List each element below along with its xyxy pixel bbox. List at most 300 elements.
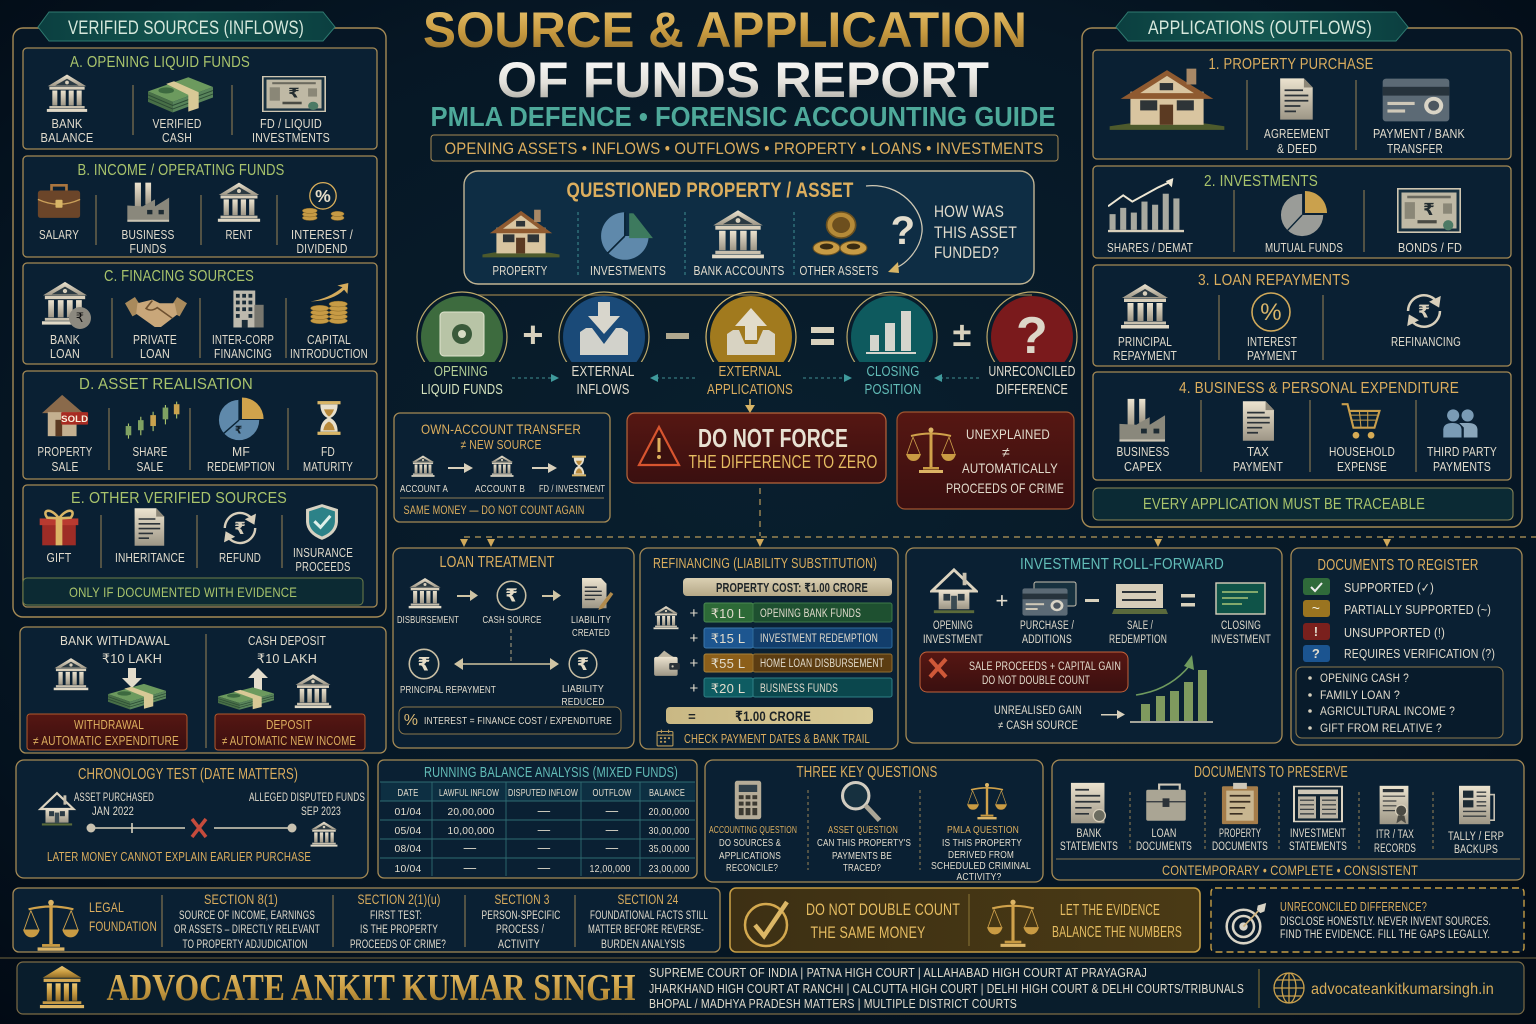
item: pmla question: PMLA QUESTION <box>947 824 1019 836</box>
item: liability reduced: REDUCED <box>562 696 605 708</box>
tagline: CONTEMPORARY • COMPLETE • CONSISTENT <box>1162 862 1418 878</box>
status: partially supported: ~ <box>1312 600 1320 616</box>
item: cash source: CASH SOURCE <box>482 614 542 626</box>
website: advocateankitkumarsingh.in <box>1311 981 1494 998</box>
item: inheritance <box>115 508 185 565</box>
item: investment statements: STATEMENTS <box>1289 841 1347 853</box>
circle: external inflows: EXTERNAL <box>572 363 634 380</box>
status: unsupported: UNSUPPORTED (!) <box>1344 626 1445 640</box>
item: loan documents: DOCUMENTS <box>1136 841 1192 853</box>
item: household expense: EXPENSE <box>1337 460 1387 474</box>
item: pmla question: DERIVED FROM <box>948 849 1014 861</box>
item: bonds fd <box>1398 189 1462 255</box>
panel: D asset realisation <box>23 371 377 479</box>
header: verified sources <box>38 12 335 41</box>
question mark: ? <box>891 209 915 253</box>
table: OUTFLOW <box>592 787 632 799</box>
panel: three key questions: THREE KEY QUESTIONS <box>796 764 938 781</box>
left event: ASSET PURCHASED <box>74 792 154 804</box>
callout: do not double count <box>920 652 1128 692</box>
item: mf redemption: MF <box>232 445 250 459</box>
cash deposit: ≠ AUTOMATIC NEW INCOME <box>222 734 356 748</box>
circle: external inflows <box>559 292 649 398</box>
note: only if documented: ONLY IF DOCUMENTED WITH EVIDENCE <box>69 584 297 600</box>
item: shares demat: SHARES / DEMAT <box>1107 241 1193 255</box>
item: household expense: HOUSEHOLD <box>1329 445 1395 459</box>
title line 2: OF FUNDS REPORT <box>497 52 989 108</box>
item: sale redemption: REDEMPTION <box>1109 634 1167 646</box>
panel: own-account transfer: ACCOUNT B <box>475 483 525 495</box>
title block <box>423 2 1058 161</box>
item: principal repayment <box>1113 284 1177 363</box>
header: verified sources: VERIFIED SOURCES (INFLOWS) <box>68 18 304 39</box>
item: share sale: SALE <box>136 460 164 474</box>
checklist: FAMILY LOAN ? <box>1320 690 1400 702</box>
panel: A opening liquid funds: A. OPENING LIQUID FUNDS <box>70 54 250 71</box>
panel: verified sources (inflows) <box>13 12 386 617</box>
panel: 1 property purchase: 1. PROPERTY PURCHASE <box>1208 56 1374 73</box>
item: third party payments <box>1427 409 1497 474</box>
item: tally erp backups: TALLY / ERP <box>1448 831 1504 843</box>
item: private loan: LOAN <box>140 347 170 361</box>
operator equals <box>811 327 834 345</box>
item: accounting question: DO SOURCES & <box>719 837 781 849</box>
item: itr tax records: RECORDS <box>1374 843 1416 855</box>
item: accounting question: APPLICATIONS <box>719 850 781 862</box>
cash deposit: ₹10 LAKH <box>257 651 317 666</box>
panel: own-account transfer: SAME MONEY — DO NOT COUNT AGAIN <box>404 503 584 517</box>
panel: investment roll-forward: INVESTMENT ROLL-FORWARD <box>1020 556 1224 573</box>
panel: 4 business and personal expenditure <box>1093 372 1511 480</box>
item: payment bank transfer: PAYMENT / BANK <box>1373 127 1465 141</box>
courts list <box>649 966 1244 1011</box>
table <box>380 782 695 876</box>
section 24: BURDEN ANALYSIS <box>601 939 685 951</box>
table: — <box>538 841 551 855</box>
item: principal repayment <box>400 649 496 696</box>
item: opening investment <box>923 570 983 646</box>
item: verified cash <box>148 77 213 145</box>
table: DATE <box>398 787 418 799</box>
panel: documents to preserve <box>1052 760 1524 880</box>
note: check payment dates: CHECK PAYMENT DATES & BANK TRAIL <box>684 732 870 746</box>
status: partially supported: PARTIALLY SUPPORTED (~) <box>1344 603 1491 617</box>
item: bank loan: LOAN <box>50 347 80 361</box>
callout: unreconciled difference: UNRECONCILED DIFFERENCE? <box>1280 900 1427 914</box>
icon: scales <box>23 900 79 951</box>
checklist: OPENING CASH ? <box>1320 673 1409 685</box>
item: salary: SALARY <box>39 228 79 242</box>
panel: questioned property / asset <box>464 171 1034 284</box>
item: mutual funds <box>1265 191 1343 255</box>
bank withdrawal: ≠ AUTOMATIC EXPENDITURE <box>33 734 179 748</box>
panel: own-account transfer: FD / INVESTMENT <box>539 483 605 495</box>
arrows <box>448 463 557 473</box>
section 2(1)(u) <box>350 892 446 951</box>
bank withdrawal: ₹10 LAKH <box>102 651 162 666</box>
item: tax payment <box>1233 401 1283 474</box>
connector <box>510 629 512 664</box>
item: business funds <box>122 183 174 256</box>
section 24 <box>588 892 708 951</box>
panel: 3 loan repayments <box>1093 265 1511 366</box>
panel: 3 loan repayments: 3. LOAN REPAYMENTS <box>1198 272 1350 289</box>
item: interest dividend: DIVIDEND <box>296 242 348 256</box>
panel: E other verified sources: E. OTHER VERIFIED SOURCES <box>71 490 287 507</box>
panel: 2 investments <box>1093 166 1511 258</box>
item: investment statements: INVESTMENT <box>1290 828 1346 840</box>
chart: rising bars <box>1130 655 1213 722</box>
item: property documents: PROPERTY <box>1219 828 1261 840</box>
section 2(1)(u): SECTION 2(1)(u) <box>358 892 440 907</box>
callout: unexplained not proceeds of crime <box>897 412 1074 509</box>
label: LEGAL <box>89 899 124 915</box>
panel: own-account transfer: OWN-ACCOUNT TRANSFER <box>421 421 581 437</box>
panel: running balance analysis: RUNNING BALANCE ANALYSIS (MIXED FUNDS) <box>424 764 678 781</box>
row: investment redemption: + <box>690 630 699 647</box>
item: inter-corp financing: FINANCING <box>214 347 272 361</box>
item: capital introduction <box>290 283 368 361</box>
item: closing investment <box>1211 583 1271 646</box>
item: bank statements <box>1060 783 1118 853</box>
item: property sale: SALE <box>52 460 78 474</box>
panel: B income operating funds: B. INCOME / OPERATING FUNDS <box>78 162 284 179</box>
row: home loan disbursement: + <box>690 655 699 672</box>
panel: 2 investments: 2. INVESTMENTS <box>1204 173 1318 190</box>
callout: do not force: DO NOT FORCE <box>698 423 848 453</box>
cash deposit: CASH DEPOSIT <box>248 633 326 648</box>
item: interest payment: PAYMENT <box>1247 349 1297 363</box>
panel: E other verified sources <box>23 485 377 607</box>
item: accounting question: ACCOUNTING QUESTION <box>709 824 797 836</box>
item: fd maturity <box>303 401 353 474</box>
item: asset question: ASSET QUESTION <box>828 824 898 836</box>
icon: target <box>1227 903 1266 943</box>
timeline <box>86 819 296 837</box>
item: liability created <box>571 578 613 639</box>
item: share sale: SHARE <box>132 445 168 459</box>
note: traceable <box>1093 488 1513 520</box>
table: — <box>538 823 551 837</box>
bank withdrawal: BANK WITHDAWAL <box>60 633 170 648</box>
item: verified cash: VERIFIED <box>152 117 202 131</box>
item: inter-corp financing <box>212 291 274 361</box>
row: opening bank funds: OPENING BANK FUNDS <box>760 608 861 620</box>
item: fd liquid investments <box>252 77 330 145</box>
left event <box>74 792 154 818</box>
item: itr tax records <box>1374 786 1416 855</box>
item: tax payment: PAYMENT <box>1233 460 1283 474</box>
item: capital introduction: CAPITAL <box>307 333 351 347</box>
panel: C financing sources: C. FINACING SOURCES <box>104 268 254 285</box>
equation row <box>417 292 1077 398</box>
cash deposit <box>215 633 365 750</box>
connector: dashed distribution line <box>460 488 1536 547</box>
footer <box>17 962 1524 1014</box>
table: 35,00,000 <box>648 843 690 855</box>
note: interest: % <box>404 712 418 729</box>
item: bank statements: BANK <box>1076 828 1102 840</box>
item: fd liquid investments: INVESTMENTS <box>252 131 330 145</box>
circle: closing position: POSITION <box>864 381 922 398</box>
panel: A opening liquid funds <box>23 48 377 149</box>
item: principal repayment: PRINCIPAL REPAYMENT <box>400 684 496 696</box>
callout: do not force <box>627 413 886 483</box>
item: pmla question: ACTIVITY? <box>956 871 1002 883</box>
table: 23,00,000 <box>648 863 690 875</box>
item: accounting question: RECONCILE? <box>726 862 778 874</box>
item: bank loan: BANK <box>50 333 80 347</box>
item: loan documents <box>1136 785 1192 853</box>
heading: QUESTIONED PROPERTY / ASSET <box>566 179 854 202</box>
row: business funds <box>690 678 892 697</box>
note: unrealised gain: UNREALISED GAIN <box>994 705 1082 717</box>
item: agreement and deed: & DEED <box>1277 142 1317 156</box>
item: household expense <box>1329 404 1395 474</box>
circle: opening liquid funds: LIQUID FUNDS <box>421 381 503 398</box>
pill: property cost <box>683 578 892 596</box>
circle: external applications <box>706 292 796 398</box>
panel: 1 property purchase <box>1093 50 1511 159</box>
item: bank balance: BANK <box>52 117 83 131</box>
section 3 <box>482 892 560 951</box>
icon: bank <box>654 606 678 629</box>
item: interest dividend: INTEREST / <box>291 228 353 242</box>
panel: documents to register <box>1291 548 1522 745</box>
panel: own-account transfer: ≠ NEW SOURCE <box>460 437 542 452</box>
conclusion: LATER MONEY CANNOT EXPLAIN EARLIER PURCHASE <box>47 849 311 864</box>
status: supported <box>1303 578 1434 595</box>
checklist: AGRICULTURAL INCOME ? <box>1320 706 1455 718</box>
table: BALANCE <box>649 787 685 799</box>
header: applications <box>1116 12 1408 41</box>
callout: do not force: THE DIFFERENCE TO ZERO <box>688 452 878 472</box>
item: pmla question: IS THIS PROPERTY <box>942 837 1022 849</box>
item: share sale <box>126 402 179 474</box>
panel: three key questions <box>705 760 1043 883</box>
how was this asset funded: FUNDED? <box>934 243 999 262</box>
item: bank statements: STATEMENTS <box>1060 841 1118 853</box>
courts list: SUPREME COURT OF INDIA | PATNA HIGH COURT | ALLAHABAD HIGH COURT AT PRAYAGRAJ <box>649 966 1147 980</box>
panel: documents to register: DOCUMENTS TO REGISTER <box>1318 557 1478 574</box>
arrows: dotted flow <box>512 374 981 382</box>
table: — <box>464 841 477 855</box>
item: sale redemption <box>1109 584 1168 646</box>
item: refund: REFUND <box>219 551 261 565</box>
item: asset question <box>817 783 911 874</box>
arrow: applications to warning <box>745 399 755 413</box>
item: property documents: DOCUMENTS <box>1212 841 1268 853</box>
circle: opening liquid funds <box>417 292 507 398</box>
item: accounting question <box>709 781 797 874</box>
icon: check circle <box>745 902 787 946</box>
item: fd maturity: FD <box>321 445 335 459</box>
item: mf redemption: REDEMPTION <box>207 460 275 474</box>
status: supported: SUPPORTED (✓) <box>1344 581 1434 595</box>
panel: chronology test <box>16 760 368 878</box>
item: refinancing <box>1391 295 1461 349</box>
right event <box>249 792 365 818</box>
panel: legal foundation <box>13 888 720 952</box>
courts list: BHOPAL / MADHYA PRADESH MATTERS | MULTIPLE DISTRICT COURTS <box>649 997 1017 1011</box>
item: disbursement: DISBURSEMENT <box>397 614 459 626</box>
item: business funds: FUNDS <box>130 242 166 256</box>
row: home loan disbursement <box>690 654 892 672</box>
icon: scales <box>987 900 1039 947</box>
item: liability created: CREATED <box>572 627 610 639</box>
circle: external applications: APPLICATIONS <box>707 381 793 398</box>
table: 01/04 <box>394 806 422 818</box>
item: bank balance: BALANCE <box>40 131 94 145</box>
item: tax payment: TAX <box>1247 445 1269 459</box>
pill: total: = <box>688 709 696 724</box>
item: property sale <box>38 395 93 474</box>
callout: do not double count the same money: BALANCE THE NUMBERS <box>1052 924 1182 941</box>
table: 20,00,000 <box>448 806 494 818</box>
panel: loan treatment: LOAN TREATMENT <box>440 554 555 571</box>
panel: own-account transfer: ACCOUNT A <box>400 483 448 495</box>
icon: house <box>1110 69 1224 130</box>
row: home loan disbursement: ₹55 L <box>711 656 745 671</box>
section 24: SECTION 24 <box>618 892 679 907</box>
table: DISPUTED INFLOW <box>508 787 578 799</box>
panel: chronology test: CHRONOLOGY TEST (DATE MATTERS) <box>78 766 298 783</box>
section 3: PROCESS / <box>496 924 544 936</box>
panel: refinancing <box>640 548 898 749</box>
item: purchase additions <box>1020 582 1076 646</box>
item: investments <box>590 212 666 278</box>
callout: do not double count the same money <box>730 888 1200 952</box>
table: — <box>606 841 619 855</box>
section 8(1): OR ASSETS – DIRECTLY RELEVANT <box>174 924 320 936</box>
cash deposit: DEPOSIT <box>266 718 312 732</box>
item: inter-corp financing: INTER-CORP <box>212 333 274 347</box>
item: bank balance <box>40 75 94 145</box>
section 8(1): SECTION 8(1) <box>204 892 278 907</box>
item: private loan <box>125 297 187 361</box>
icon: house <box>40 793 74 826</box>
checklist <box>1296 667 1503 738</box>
item: private loan: PRIVATE <box>133 333 177 347</box>
panel: own-account transfer <box>394 413 610 522</box>
item: interest payment: % <box>1260 299 1282 326</box>
header: applications: APPLICATIONS (OUTFLOWS) <box>1148 18 1372 39</box>
item: agreement and deed <box>1264 78 1330 156</box>
item: insurance proceeds: PROCEEDS <box>296 560 350 574</box>
callout: do not double count the same money: THE SAME MONEY <box>810 923 926 942</box>
item: opening investment: INVESTMENT <box>923 634 983 646</box>
item: rent: RENT <box>226 228 253 242</box>
item: other assets: OTHER ASSETS <box>800 264 878 278</box>
item: mf redemption <box>207 397 275 474</box>
panel: investment roll-forward: + <box>995 588 1009 613</box>
table: 20,00,000 <box>648 806 690 818</box>
table: 05/04 <box>394 825 422 837</box>
icon: warning triangle <box>639 427 679 465</box>
pill: total <box>666 707 873 724</box>
advocate name: ADVOCATE ANKIT KUMAR SINGH <box>106 967 636 1009</box>
item: closing investment: CLOSING <box>1221 620 1261 632</box>
note: unrealised gain: ≠ CASH SOURCE <box>998 720 1078 732</box>
table: 10/04 <box>394 863 422 875</box>
bank withdrawal <box>27 633 187 750</box>
item: shares demat <box>1107 178 1193 255</box>
subtitle: PMLA DEFENCE • FORENSIC ACCOUNTING GUIDE <box>430 101 1056 132</box>
note: traceable: EVERY APPLICATION MUST BE TRACEABLE <box>1143 496 1425 513</box>
item: rent <box>218 183 260 242</box>
arrow <box>457 590 478 601</box>
item: third party payments: THIRD PARTY <box>1427 445 1497 459</box>
item: capital introduction: INTRODUCTION <box>290 347 368 361</box>
status: partially supported <box>1303 600 1491 617</box>
callout: do not double count the same money: LET THE EVIDENCE <box>1060 902 1160 919</box>
panel: 4 business and personal expenditure: 4. BUSINESS & PERSONAL EXPENDITURE <box>1179 380 1459 397</box>
item: purchase additions: PURCHASE / <box>1020 620 1074 632</box>
section 8(1): SOURCE OF INCOME, EARNINGS <box>179 910 315 922</box>
item: mutual funds: MUTUAL FUNDS <box>1265 241 1343 255</box>
note: unrealised gain <box>994 705 1125 732</box>
left event: JAN 2022 <box>92 806 134 818</box>
section 24: MATTER BEFORE REVERSE- <box>588 924 704 936</box>
table: 10,00,000 <box>448 825 494 837</box>
item: asset question: PAYMENTS BE <box>832 850 892 862</box>
panel: applications (outflows) <box>1082 12 1522 527</box>
item: investment statements <box>1289 787 1347 853</box>
how was this asset funded: THIS ASSET <box>934 223 1017 242</box>
pill: total: ₹1.00 CRORE <box>735 708 811 724</box>
item: third party payments: PAYMENTS <box>1433 460 1491 474</box>
item: bank loan: ₹ <box>76 310 84 325</box>
right event: SEP 2023 <box>301 806 341 818</box>
item: cash source <box>482 581 542 626</box>
note: only if documented <box>23 578 363 605</box>
icon: globe <box>1274 973 1304 1003</box>
table: — <box>464 861 477 875</box>
row: business funds: ₹20 L <box>711 681 745 696</box>
row: business funds: + <box>690 680 699 697</box>
icon: gold bank <box>40 966 84 1008</box>
table: 12,00,000 <box>590 863 630 875</box>
item: business capex: CAPEX <box>1124 460 1162 474</box>
circle: external applications: EXTERNAL <box>718 363 782 380</box>
section 3: SECTION 3 <box>494 892 550 907</box>
item: pmla question <box>931 783 1031 883</box>
item: pmla question: SCHEDULED CRIMINAL <box>931 860 1031 872</box>
item: tally erp backups: BACKUPS <box>1454 844 1498 856</box>
arrow: question arc <box>866 186 922 273</box>
keywords strip <box>431 135 1058 161</box>
status: requires verification <box>1303 645 1495 662</box>
row: investment redemption: INVESTMENT REDEMPTION <box>760 633 878 645</box>
status: unsupported <box>1303 623 1445 640</box>
item: closing investment: INVESTMENT <box>1211 634 1271 646</box>
item: investments: INVESTMENTS <box>590 264 666 278</box>
section 24: FOUNDATIONAL FACTS STILL <box>590 910 708 922</box>
item: bonds fd: BONDS / FD <box>1398 241 1462 255</box>
status: requires verification: ? <box>1312 646 1320 661</box>
item: payment bank transfer: TRANSFER <box>1387 142 1443 156</box>
item: payment bank transfer <box>1373 79 1465 156</box>
panel: B income operating funds <box>23 156 377 257</box>
note: check payment dates <box>657 730 870 746</box>
callout: unexplained not proceeds of crime: AUTOMATICALLY <box>962 460 1058 476</box>
item: opening investment: OPENING <box>933 620 973 632</box>
section 3: PERSON-SPECIFIC <box>482 910 560 922</box>
item: liability created: LIABILITY <box>571 614 611 626</box>
panel: withdrawal and deposit <box>20 627 386 753</box>
circle: opening liquid funds: OPENING <box>434 363 488 380</box>
item: insurance proceeds <box>293 504 353 574</box>
